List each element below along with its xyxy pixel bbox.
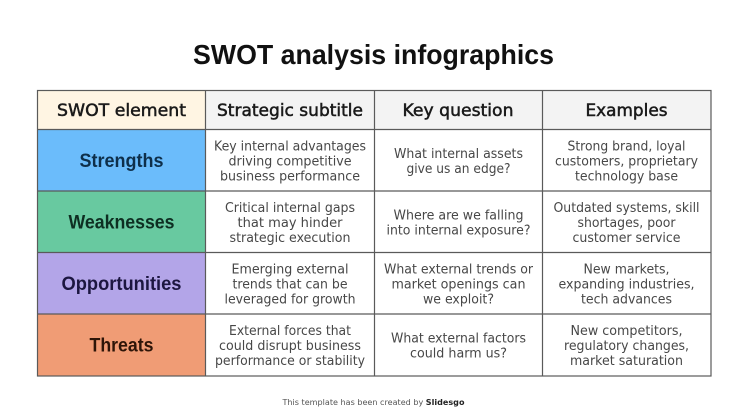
examples: Opportunities: tech advances [581, 292, 672, 307]
strategic subtitle: Opportunities: trends that can be [232, 277, 348, 292]
examples: Strengths: Strong brand, loyal [568, 139, 686, 154]
examples: Strengths [555, 139, 698, 184]
strategic subtitle: Opportunities: leveraged for growth [224, 292, 356, 307]
strategic subtitle: Strengths [214, 139, 366, 184]
strategic subtitle: Threats: External forces that [229, 324, 351, 339]
row: Opportunities [38, 252, 694, 314]
strategic subtitle: Strengths: Key internal advantages [214, 139, 366, 154]
key question: Strengths [394, 147, 523, 177]
strategic subtitle: Threats [215, 324, 365, 369]
examples: Weaknesses: Outdated systems, skill [554, 201, 700, 216]
examples: Threats: regulatory changes, [564, 339, 689, 354]
strategic subtitle: Threats: performance or stability [215, 354, 365, 369]
label: Strengths: Strengths [80, 151, 164, 172]
header: Examples: Examples [586, 101, 668, 120]
examples: Weaknesses: shortages, poor [578, 216, 676, 231]
key question: Threats: What external factors [391, 331, 526, 346]
key question: Weaknesses: Where are we falling [394, 208, 524, 223]
header: Key question [374, 90, 542, 130]
key question: Strengths: What internal assets [394, 147, 523, 162]
key question: Threats [391, 331, 526, 361]
examples: Threats: New competitors, [570, 324, 682, 339]
header: Key question: Key question [402, 101, 514, 120]
panel: SWOT table [38, 90, 711, 376]
strategic subtitle: Weaknesses [225, 201, 355, 246]
key question: Opportunities: market openings can [392, 277, 526, 292]
header: Strategic subtitle: Strategic subtitle [217, 101, 363, 120]
header: Strategic subtitle [206, 90, 374, 130]
examples: Opportunities: expanding industries, [558, 277, 694, 292]
label: Weaknesses [38, 191, 206, 252]
examples: Threats [564, 324, 689, 369]
key question: Weaknesses: into internal exposure? [386, 223, 530, 238]
examples: Strengths: technology base [575, 169, 678, 184]
key question: Threats: could harm us? [410, 346, 507, 361]
title: SWOT analysis infographics [193, 39, 554, 70]
row: Threats [38, 314, 689, 376]
key question: Opportunities: What external trends or [384, 262, 534, 277]
label: Strengths [38, 130, 206, 191]
label: Weaknesses: Weaknesses [68, 212, 174, 234]
key question: Strengths: give us an edge? [406, 162, 510, 177]
header: SWOT element: SWOT element [57, 101, 187, 120]
row: Strengths [38, 130, 698, 191]
strategic subtitle: Strengths: business performance [220, 169, 360, 184]
strategic subtitle: Opportunities: Emerging external [232, 262, 348, 277]
examples: Threats: market saturation [570, 354, 683, 369]
examples: Opportunities [558, 262, 694, 307]
key question: Opportunities: we exploit? [423, 292, 494, 307]
strategic subtitle: Weaknesses: strategic execution [230, 231, 350, 246]
examples: Opportunities: New markets, [584, 262, 670, 277]
row: Weaknesses [38, 191, 700, 252]
strategic subtitle: Weaknesses: that may hinder [238, 216, 343, 231]
strategic subtitle: Weaknesses: Critical internal gaps [225, 201, 355, 216]
key question: Weaknesses [386, 208, 530, 238]
footer credit: This template has been created by Slidesgo [281, 398, 465, 407]
key question: Opportunities [384, 262, 534, 307]
header: Examples [542, 90, 711, 130]
strategic subtitle: Opportunities [224, 262, 356, 307]
header: SWOT element [38, 90, 206, 130]
label: Threats: Threats [90, 336, 154, 356]
examples: Strengths: customers, proprietary [555, 154, 698, 169]
strategic subtitle: Strengths: driving competitive [228, 154, 352, 169]
examples: Weaknesses [554, 201, 700, 246]
label: Opportunities: Opportunities [62, 274, 182, 295]
examples: Weaknesses: customer service [572, 231, 680, 246]
strategic subtitle: Threats: could disrupt business [219, 339, 361, 354]
label: Opportunities [38, 252, 206, 314]
header row [38, 90, 711, 130]
label: Threats [38, 314, 206, 376]
